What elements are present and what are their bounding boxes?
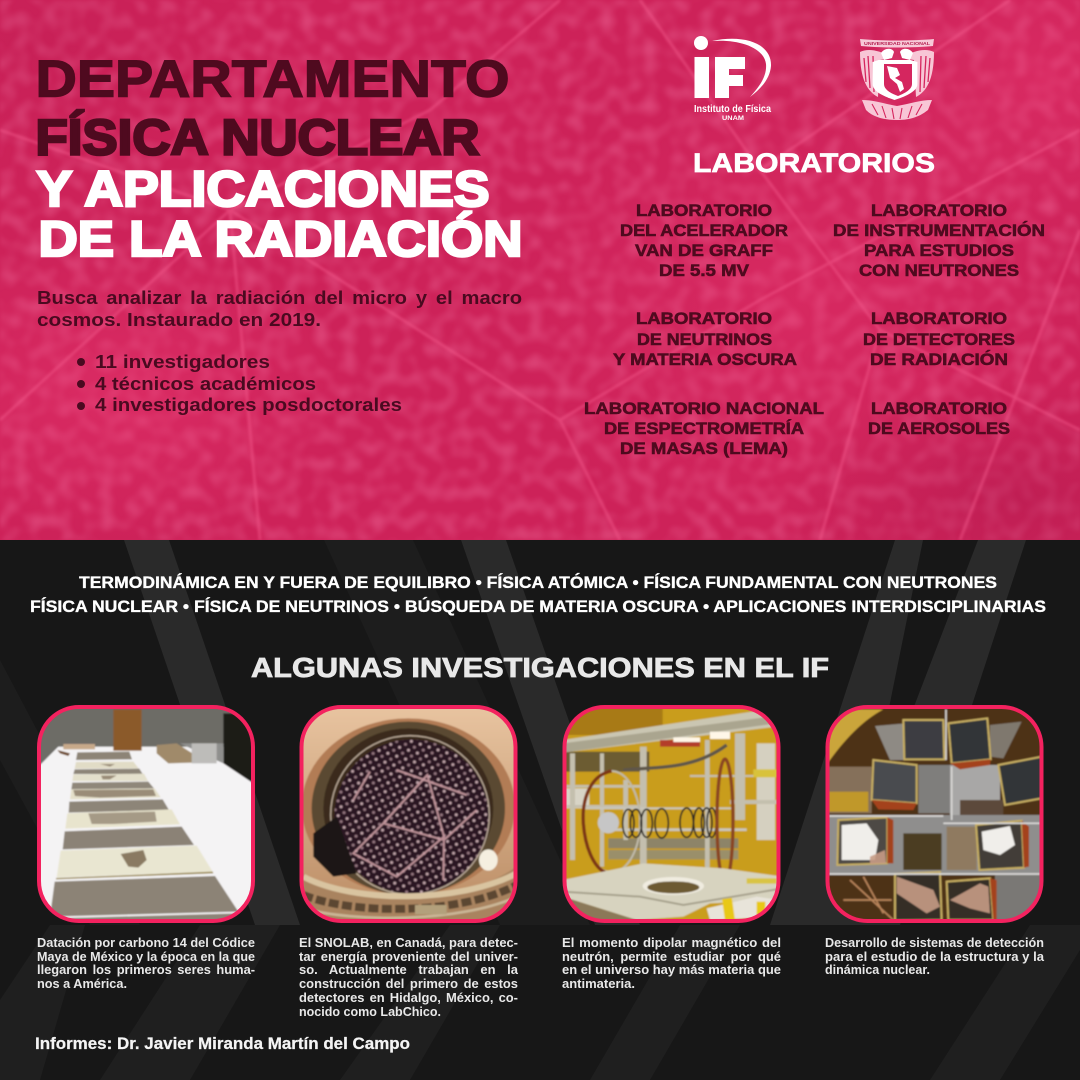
lab: instrumentación neutrones: LABORATORIO [871, 202, 1007, 220]
caption: SNOLAB: tar energía proveniente del univer- [299, 949, 518, 964]
caption: momento dipolar: El momento dipolar magnético del [562, 935, 781, 950]
photo: SNOLAB [300, 705, 520, 927]
caption: SNOLAB: El SNOLAB, en Canadá, para detec- [299, 935, 518, 950]
heading: laboratorios: LABORATORIOS [693, 148, 935, 178]
caption: momento dipolar: neutrón, permite estudiar por qué [562, 949, 781, 964]
lab: aerosoles: DE AEROSOLES [868, 420, 1010, 438]
caption: SNOLAB: nocido como LabChico. [299, 1004, 441, 1019]
caption: momento dipolar [562, 935, 781, 991]
title: FÍSICA NUCLEAR [36, 110, 480, 166]
lab: instrumentación neutrones [833, 202, 1045, 280]
caption: sistemas de detección: dinámica nuclear. [825, 962, 930, 977]
lab: detectores [863, 310, 1015, 369]
lab: aerosoles: LABORATORIO [871, 400, 1007, 418]
lab: neutrinos: DE NEUTRINOS [637, 331, 772, 349]
lab: detectores: DE DETECTORES [863, 331, 1015, 349]
staff bullet list: 11 investigadores [95, 351, 270, 372]
caption: SNOLAB: so. Actualmente trabajan en la [299, 962, 519, 977]
research topics: TERMODINÁMICA EN Y FUERA DE EQUILIBRO • FÍSICA ATÓMICA • FÍSICA FUNDAMENTAL CON NEUTRONES [79, 573, 997, 592]
intro text [37, 287, 522, 330]
lab: Van de Graff: DEL ACELERADOR [620, 222, 788, 240]
intro text: cosmos. Instaurado en 2019. [37, 309, 321, 330]
lab: LEMA: DE MASAS (LEMA) [620, 440, 788, 458]
caption: códice maya [37, 935, 255, 991]
caption: SNOLAB: construcción del primero de estos [299, 976, 518, 991]
title: DEPARTAMENTO [36, 50, 510, 108]
logo: UNAM shield: UNIVERSIDAD NACIONAL [864, 41, 931, 46]
research topics [30, 573, 1046, 616]
caption: sistemas de detección: Desarrollo de sistemas de detección [825, 935, 1044, 950]
caption: sistemas de detección: para el estudio de la estructura y la [825, 949, 1045, 964]
logo: Instituto de Física [694, 36, 771, 122]
caption: SNOLAB [299, 935, 519, 1019]
caption: sistemas de detección [825, 935, 1045, 977]
caption: códice maya: Maya de México y la época en la que [37, 949, 255, 964]
lab: Van de Graff [620, 202, 788, 280]
lab: Van de Graff: DE 5.5 MV [659, 262, 749, 280]
lab: neutrinos: Y MATERIA OSCURA [613, 351, 797, 369]
caption: momento dipolar: antimateria. [562, 976, 635, 991]
dark lower background [0, 540, 1080, 1080]
heading: algunas investigaciones: ALGUNAS INVESTIGACIONES EN EL IF [251, 652, 829, 683]
staff bullet list: 4 técnicos académicos [95, 373, 316, 394]
title: Y APLICACIONES [36, 161, 489, 217]
caption: códice maya: nos a América. [37, 976, 127, 991]
logo: Instituto de Física: Instituto de Física [694, 104, 771, 115]
logo: Instituto de Física: UNAM [722, 115, 744, 122]
lab: LEMA: DE ESPECTROMETRÍA [604, 419, 804, 438]
caption: códice maya: llegaron los primeros seres huma- [37, 962, 255, 977]
lab: instrumentación neutrones: DE INSTRUMENTACIÓN [833, 221, 1045, 240]
lab: instrumentación neutrones: CON NEUTRONES [859, 262, 1019, 280]
caption: SNOLAB: detectores en Hidalgo, México, co- [299, 990, 518, 1005]
photo: códice maya [37, 705, 257, 927]
pink header background [0, 0, 1080, 620]
intro text: Busca analizar la radiación del micro y el macro [37, 287, 522, 308]
lab: LEMA: LABORATORIO NACIONAL [584, 400, 824, 418]
lab: Van de Graff: LABORATORIO [636, 202, 772, 220]
lab: LEMA [584, 400, 824, 458]
lab: detectores: LABORATORIO [871, 310, 1007, 328]
logo: UNAM shield [860, 39, 934, 120]
photo: momento dipolar [563, 705, 783, 927]
lab: neutrinos [613, 310, 797, 369]
staff bullet list [77, 351, 402, 415]
title [36, 50, 522, 267]
lab: detectores: DE RADIACIÓN [870, 350, 1008, 369]
caption: momento dipolar: en el universo hay más materia que [562, 962, 781, 977]
caption: códice maya: Datación por carbono 14 del Códice [37, 935, 255, 950]
photo: sistemas de detección [825, 705, 1045, 925]
research topics: FÍSICA NUCLEAR • FÍSICA DE NEUTRINOS • BÚSQUEDA DE MATERIA OSCURA • APLICACIONES INTERDISCIPLINARIAS [30, 597, 1046, 616]
lab: neutrinos: LABORATORIO [636, 310, 772, 328]
staff bullet list: 4 investigadores posdoctorales [95, 394, 402, 415]
contact line: Informes: Dr. Javier Miranda Martín del Campo [35, 1034, 410, 1053]
lab: instrumentación neutrones: PARA ESTUDIOS [864, 242, 1014, 260]
lab: Van de Graff: VAN DE GRAFF [635, 242, 773, 260]
title: DE LA RADIACIÓN [38, 211, 522, 267]
lab: aerosoles [868, 400, 1010, 438]
